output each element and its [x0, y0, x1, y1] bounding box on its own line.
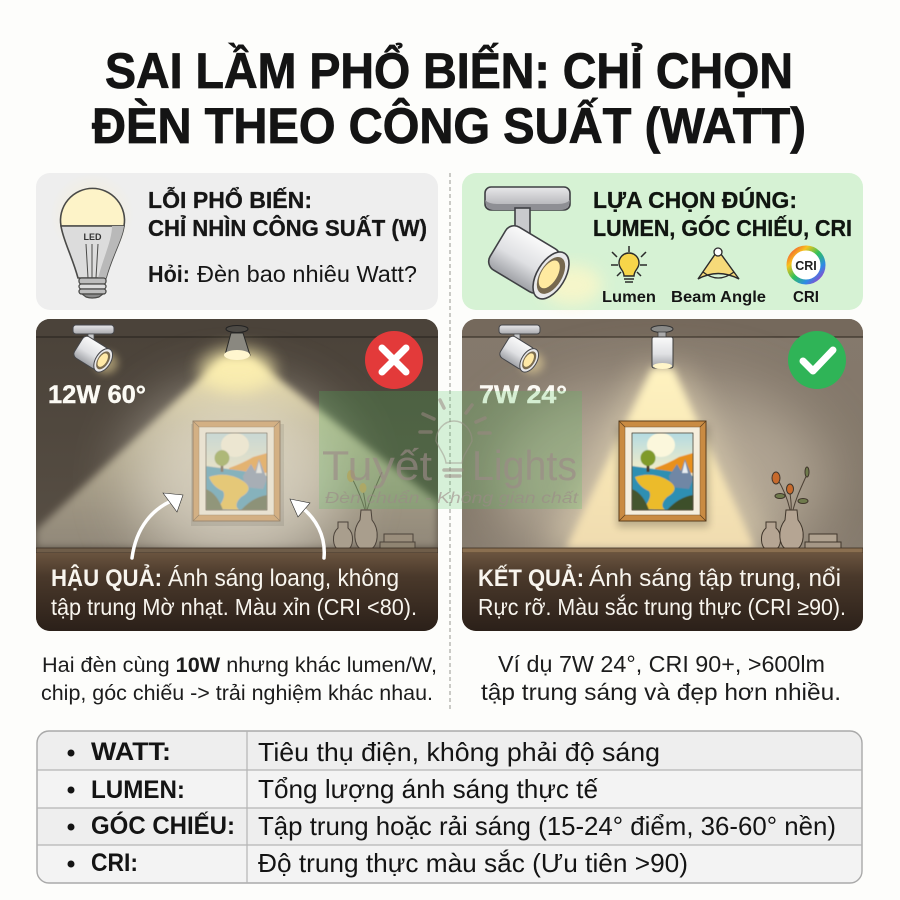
painting (vivid) — [617, 421, 709, 527]
row: watt: Tiêu thụ điện, không phải độ sáng — [258, 737, 660, 767]
row: watt: WATT: — [91, 738, 171, 766]
text: right explanation: tập trung sáng và đẹp hơn nhiều. — [481, 679, 841, 705]
row: CRI: CRI: — [91, 849, 138, 877]
text: question: Hỏi: — [148, 261, 190, 287]
labels: lumen, beam angle, CRI: CRI — [793, 289, 819, 306]
text: result: KẾT QUẢ: — [478, 563, 584, 592]
icon: track spotlight — [498, 325, 544, 375]
watermark — [319, 391, 582, 509]
icon: track spotlight — [72, 325, 118, 375]
text: consequence: Ánh sáng loang, không — [168, 565, 399, 592]
label: 12W 60°: 12W 60° — [48, 381, 146, 409]
text: left explanation: chip, góc chiếu -> trải nghiệm khác nhau. — [41, 682, 433, 705]
label: 7W 24°: 7W 24° — [479, 381, 567, 409]
shelf decor — [333, 470, 415, 549]
text: right explanation: Ví dụ 7W 24°, CRI 90+, >600lm — [498, 651, 825, 677]
heading: common mistake: LỖI PHỔ BIẾN: — [148, 185, 312, 213]
heading: common mistake: CHỈ NHÌN CÔNG SUẤT (W) — [148, 213, 427, 241]
icon: red cross badge — [365, 331, 423, 389]
title: SAI LẦM PHỔ BIẾN: CHỈ CHỌN — [105, 42, 793, 99]
row: beam angle: Tập trung hoặc rải sáng (15-24° điểm, 36-60° nền) — [258, 811, 836, 841]
row: lumen: Tổng lượng ánh sáng thực tế — [258, 774, 599, 804]
row: lumen — [68, 774, 599, 804]
row: CRI: Độ trung thực màu sắc (Ưu tiên >90) — [258, 848, 688, 878]
row: CRI — [68, 848, 688, 878]
labels: lumen, beam angle, CRI — [602, 289, 819, 306]
text: result — [478, 563, 846, 620]
text: question: Đèn bao nhiêu Watt? — [197, 261, 417, 287]
arrow: left — [132, 493, 183, 558]
text: consequence: tập trung Mờ nhạt. Màu xỉn (CRI <80). — [51, 594, 417, 620]
labels: lumen, beam angle, CRI: Lumen — [602, 289, 656, 306]
icon: beam angle — [698, 248, 739, 279]
icon: green check badge — [788, 331, 846, 389]
icon: track spotlight — [484, 187, 602, 305]
text: consequence: HẬU QUẢ: — [51, 563, 162, 592]
painting (washed out) — [191, 420, 284, 526]
panel: right lighting scene — [462, 319, 863, 631]
text: left explanation: Hai đèn cùng 10W nhưng khác lumen/W, — [42, 654, 437, 677]
text: result: Rực rỡ. Màu sắc trung thực (CRI ≥90). — [478, 594, 846, 620]
icon: CRI ring — [789, 248, 823, 282]
row: watt — [68, 737, 660, 767]
shelf decor — [761, 467, 841, 549]
labels: lumen, beam angle, CRI: Beam Angle — [671, 289, 766, 306]
icon: lumen — [611, 246, 647, 282]
title — [92, 42, 806, 154]
heading: common mistake — [148, 185, 427, 241]
text: right explanation — [481, 651, 841, 705]
icon: ceiling downlight — [224, 326, 250, 360]
panel: right-choice header card — [462, 173, 863, 310]
watermark: Tuyết — [322, 442, 432, 489]
title: ĐÈN THEO CÔNG SUẤT (WATT) — [92, 97, 806, 154]
light beam — [546, 368, 775, 548]
row: lumen: LUMEN: — [91, 776, 185, 804]
icon: LED bulb — [50, 173, 134, 298]
heading: right choice: LỰA CHỌN ĐÚNG: — [593, 186, 797, 213]
panel: wrong-choice header card — [36, 173, 438, 310]
text: consequence — [51, 563, 417, 620]
text: left explanation — [41, 654, 437, 705]
watermark: Lights — [472, 442, 577, 489]
heading: right choice: LUMEN, GÓC CHIẾU, CRI — [593, 214, 852, 241]
light beam — [36, 348, 438, 570]
watermark: Đèn chuẩn - Không gian chất — [325, 489, 579, 507]
panel: wrong lighting scene — [36, 319, 438, 631]
heading: right choice — [593, 186, 852, 241]
arrow: right — [290, 499, 324, 558]
row: beam angle: GÓC CHIẾU: — [91, 810, 235, 840]
table: glossary — [37, 731, 862, 883]
icon: CRI ring: CRI — [795, 259, 817, 273]
icon: ceiling cylinder light — [651, 326, 673, 369]
icon: LED bulb: LED — [84, 232, 102, 242]
text: result: Ánh sáng tập trung, nổi — [589, 565, 841, 592]
